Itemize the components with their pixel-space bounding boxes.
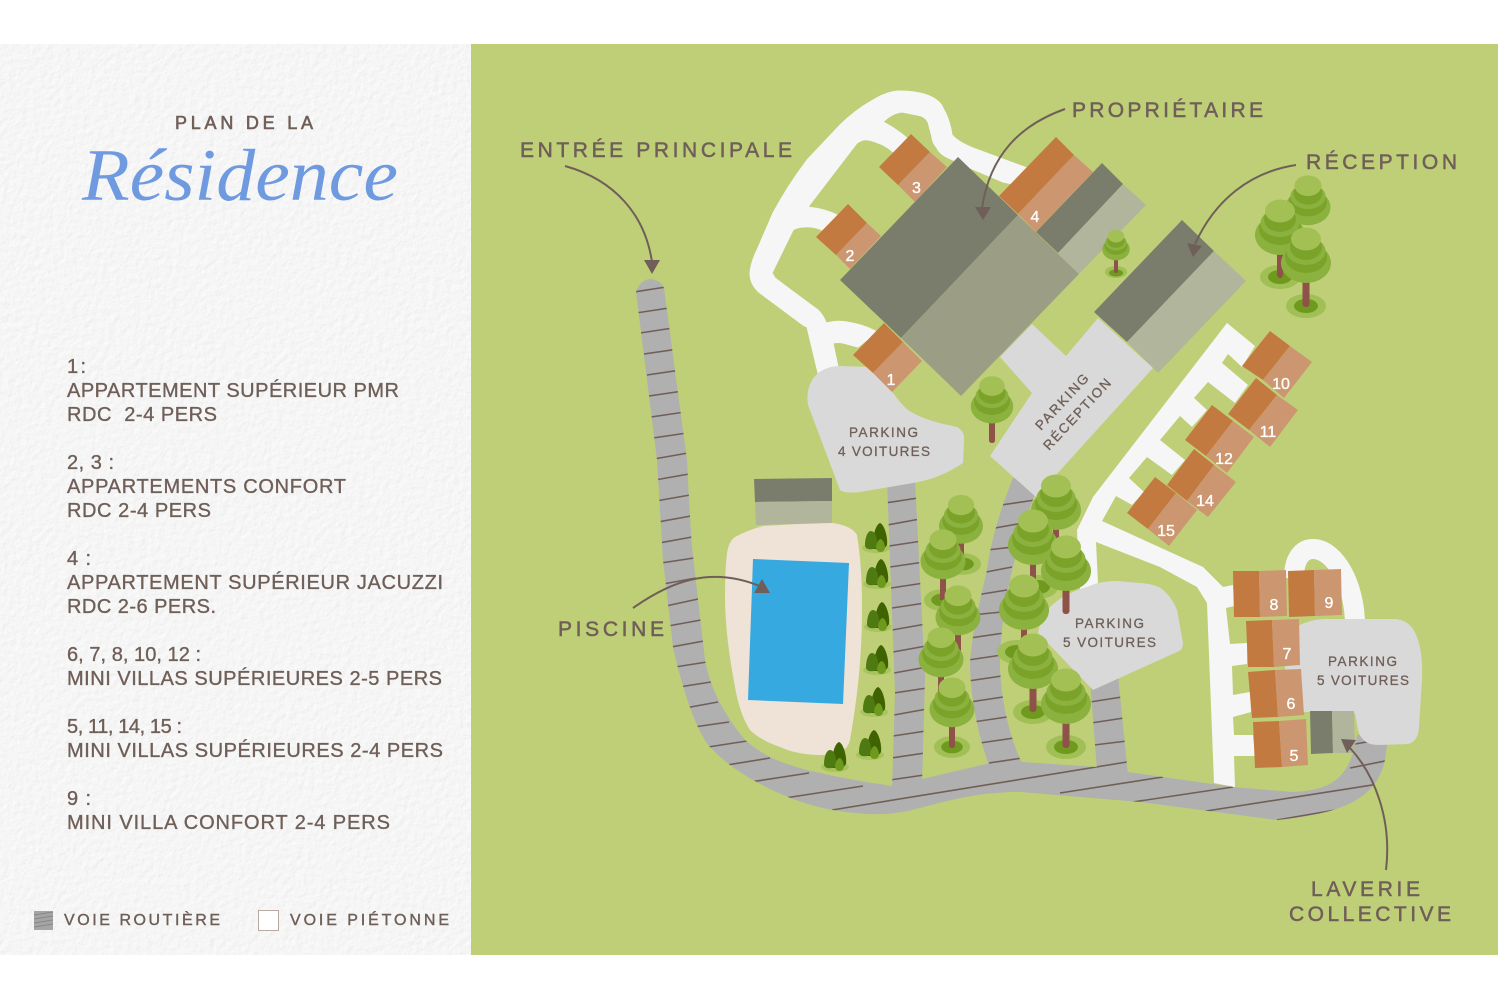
unit 7 [1246, 619, 1300, 667]
accommodation list: APPARTEMENTS CONFORT [67, 476, 346, 498]
unit 5: 5 [1290, 748, 1299, 765]
swimming pool [748, 559, 849, 704]
accommodation list: RDC 2-4 PERS [67, 404, 217, 426]
accommodation list [67, 356, 443, 834]
unit 10: 10 [1272, 376, 1290, 393]
parking: 5 voitures (centre) [1038, 581, 1183, 690]
unit 3: 3 [912, 180, 921, 197]
trees: central rows [918, 474, 1091, 759]
accommodation list: 9 : [67, 788, 91, 810]
lawn background [471, 44, 1498, 955]
accommodation list: MINI VILLAS SUPÉRIEURES 2-4 PERS [67, 739, 443, 762]
unit 1: 1 [887, 372, 896, 389]
main building [840, 157, 1079, 396]
parking: 5 voitures (centre): PARKING [1075, 616, 1144, 631]
label: laverie collective: LAVERIE [1311, 878, 1420, 901]
unit 4: 4 [1031, 209, 1040, 226]
arrow: réception [1187, 165, 1296, 257]
panel: site map [471, 44, 1498, 955]
unit 15: 15 [1157, 523, 1175, 540]
tree: small [1102, 230, 1130, 278]
unit 11 [1228, 378, 1298, 447]
arrow: propriétaire [975, 109, 1065, 220]
accommodation list: 4 : [67, 548, 91, 570]
pool house [754, 478, 832, 525]
building: annex [1036, 163, 1146, 274]
unit 14 [1167, 449, 1236, 517]
arrow: piscine [633, 577, 770, 608]
unit 11: 11 [1260, 424, 1276, 441]
laundry building [1310, 711, 1355, 754]
unit 8: 8 [1270, 597, 1279, 614]
paper background [0, 44, 471, 955]
unit 10 [1242, 331, 1312, 398]
parking: 5 voitures (right): 5 VOITURES [1317, 673, 1409, 688]
roads [620, 270, 1400, 830]
label: laverie collective [1289, 878, 1451, 926]
arrow: laverie [1341, 739, 1387, 870]
label: entrée principale: ENTRÉE PRINCIPALE [520, 139, 792, 162]
unit 4 [999, 137, 1093, 232]
parking: 5 voitures (right) [1285, 619, 1422, 745]
unit 12: 12 [1215, 451, 1233, 468]
accommodation list: MINI VILLA CONFORT 2-4 PERS [67, 812, 390, 834]
title: Résidence [81, 135, 398, 217]
unit 8 [1233, 570, 1287, 617]
arrow: entrée principale [565, 166, 660, 274]
parking: 5 voitures (centre): 5 VOITURES [1063, 635, 1156, 650]
unit 12 [1185, 405, 1254, 473]
unit 3 [879, 134, 947, 202]
accommodation list: APPARTEMENT SUPÉRIEUR PMR [67, 379, 399, 402]
accommodation list: 2, 3 : [67, 452, 114, 474]
accommodation list: RDC 2-6 PERS. [67, 596, 216, 618]
legend: road: VOIE ROUTIÈRE [64, 910, 220, 929]
unit 6: 6 [1287, 696, 1296, 713]
unit 14: 14 [1196, 493, 1214, 510]
trees: top right [1255, 175, 1331, 318]
legend: footpath [258, 910, 449, 930]
accommodation list: 6, 7, 8, 10, 12 : [67, 644, 201, 666]
tree: by main building [971, 376, 1013, 443]
parking: 4 voitures: 4 VOITURES [838, 444, 930, 459]
building: reception [1094, 220, 1246, 373]
panel: legend sidebar [0, 44, 471, 955]
parking: 4 voitures: PARKING [849, 425, 918, 440]
unit 15 [1127, 477, 1197, 546]
unit 9 [1288, 569, 1342, 617]
parking: réception [990, 318, 1153, 497]
parking: 4 voitures [807, 366, 964, 493]
parking: réception: PARKING [1032, 371, 1092, 433]
accommodation list: 1 : [67, 356, 86, 378]
shrubs [821, 523, 892, 772]
footpaths [750, 91, 1355, 787]
pool deck [725, 523, 862, 755]
label: réception: RÉCEPTION [1306, 151, 1457, 174]
unit 5 [1253, 719, 1308, 768]
unit 2 [816, 204, 881, 269]
parking: 5 voitures (right): PARKING [1328, 654, 1397, 669]
accommodation list: APPARTEMENT SUPÉRIEUR JACUZZI [67, 571, 443, 594]
label: piscine: PISCINE [558, 618, 664, 641]
unit 1 [853, 323, 922, 392]
label: propriétaire: PROPRIÉTAIRE [1072, 99, 1263, 122]
unit 9: 9 [1325, 595, 1334, 612]
unit 2: 2 [846, 248, 855, 265]
accommodation list: MINI VILLAS SUPÉRIEURES 2-5 PERS [67, 667, 442, 690]
label: laverie collective: COLLECTIVE [1289, 903, 1451, 926]
accommodation list: RDC 2-4 PERS [67, 500, 211, 522]
title: PLAN DE LA [175, 113, 313, 133]
unit 7: 7 [1283, 646, 1292, 663]
unit 6 [1248, 669, 1304, 718]
legend: footpath: VOIE PIÉTONNE [290, 910, 449, 929]
accommodation list: 5, 11, 14, 15 : [67, 716, 182, 738]
parking: réception: RÉCEPTION [1040, 376, 1114, 453]
